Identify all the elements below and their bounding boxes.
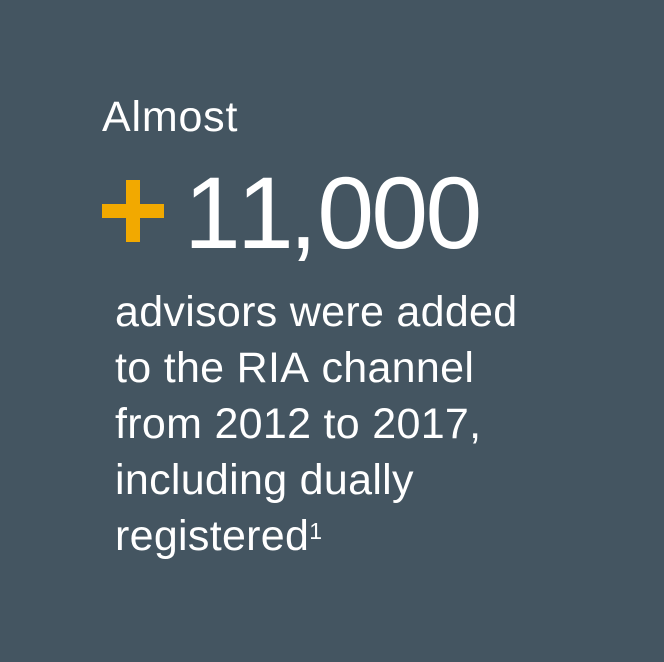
text block: description: to the RIA channel	[115, 344, 474, 392]
icon: plus sign	[102, 180, 164, 242]
text block: description	[115, 288, 517, 560]
text block: description: registered1	[115, 512, 322, 560]
big number: 11,000	[184, 156, 482, 270]
text block: description: including dually	[115, 456, 414, 504]
text block: description: from 2012 to 2017,	[115, 400, 481, 448]
text block: description: advisors were added	[115, 288, 517, 336]
heading: Almost: Almost	[102, 93, 238, 141]
